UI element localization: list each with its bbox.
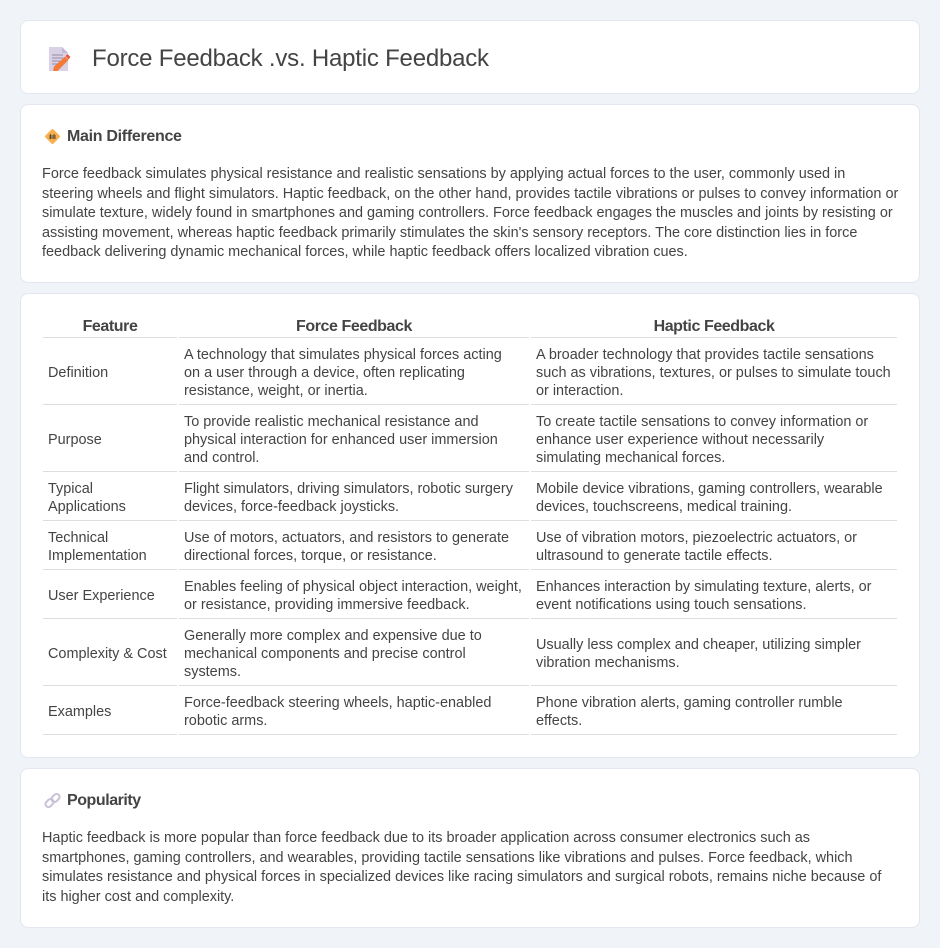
text block: popularity paragraph: Haptic feedback is more popular than force feedback due to its broader application across consumer electronics such as [42, 830, 810, 846]
row: examples [48, 695, 843, 729]
text block: popularity paragraph: simulates resistance and physical forces in specialized devices like racing simulators and surgical robots, remains niche because of [42, 869, 881, 885]
row: definition: A technology that simulates physical forces acting [184, 347, 502, 363]
row: purpose: simulating mechanical forces. [536, 450, 725, 466]
text block: main difference paragraph: Force feedback simulates physical resistance and realistic sensations by applying actual forces to the user, commonly used in [42, 166, 845, 182]
row: definition [48, 347, 891, 399]
row: definition: resistance, weight, or inertia. [184, 383, 368, 399]
heading: main difference: Main Difference [67, 128, 182, 145]
row: complexity and cost [48, 628, 861, 680]
row: technical implementation: Use of vibration motors, piezoelectric actuators, or [536, 530, 857, 546]
icon: document with pencil [49, 47, 70, 71]
row: typical applications: Mobile device vibrations, gaming controllers, wearable [536, 481, 883, 497]
row: examples: robotic arms. [184, 713, 267, 729]
row: purpose [48, 414, 868, 466]
heading: popularity: Popularity [67, 792, 141, 809]
row: user experience [48, 579, 872, 613]
row: user experience: event notifications using touch sensations. [536, 597, 806, 613]
text block: main difference paragraph: simulate texture, widely found in smartphones and gaming controllers. Force feedback engages the muscles and joints by resisting or [42, 205, 893, 221]
row: complexity and cost: Generally more complex and expensive due to [184, 628, 482, 644]
text block: main difference paragraph: steering wheels and flight simulators. Haptic feedback, on the other hand, provides tactile vibrations or pulses to convey information or [42, 186, 898, 202]
row: examples: Examples [48, 704, 111, 720]
panel: main difference [20, 104, 920, 283]
row: technical implementation: ultrasound to generate tactile effects. [536, 548, 772, 564]
row: purpose: Purpose [48, 432, 102, 448]
row: examples: Force-feedback steering wheels, haptic-enabled [184, 695, 491, 711]
text block: popularity paragraph [42, 830, 882, 905]
row: user experience: Enables feeling of physical object interaction, weight, [184, 579, 522, 595]
row: purpose: To create tactile sensations to convey information or [536, 414, 868, 430]
row: typical applications: devices, force-feedback joysticks. [184, 499, 399, 515]
row: complexity and cost: Usually less complex and cheaper, utilizing simpler [536, 637, 861, 653]
header: force feedback: Force Feedback [296, 318, 412, 335]
text block: main difference paragraph: assisting movement, whereas haptic feedback primarily stimulates the skin's sensory receptors. The core distinction lies in force [42, 225, 857, 241]
text block: popularity paragraph: its higher cost and complexity. [42, 889, 234, 905]
row: examples: effects. [536, 713, 582, 729]
row: complexity and cost: systems. [184, 664, 241, 680]
row: typical applications: devices, touchscreens, medical training. [536, 499, 792, 515]
row: technical implementation [48, 530, 857, 564]
row: typical applications: Flight simulators, driving simulators, robotic surgery [184, 481, 513, 497]
panel: title card [20, 20, 920, 94]
row: user experience: or resistance, providing immersive feedback. [184, 597, 470, 613]
row: technical implementation: Technical [48, 530, 108, 546]
row: complexity and cost: Complexity & Cost [48, 646, 167, 662]
panel: comparison table [20, 293, 920, 758]
row: technical implementation: Use of motors, actuators, and resistors to generate [184, 530, 509, 546]
text block: popularity paragraph: smartphones, gaming controllers, and wearables, providing tactile sensations like vibrations and pulses. Force feedback, which [42, 850, 853, 866]
row: user experience: Enhances interaction by simulating texture, alerts, or [536, 579, 871, 595]
row: purpose: and control. [184, 450, 259, 466]
row: typical applications: Typical [48, 481, 93, 497]
row: technical implementation: directional forces, torque, or resistance. [184, 548, 437, 564]
panel: popularity [20, 768, 920, 928]
row: purpose: enhance user experience without necessarily [536, 432, 824, 448]
row: technical implementation: Implementation [48, 548, 147, 564]
table header row [83, 318, 775, 335]
row: purpose: To provide realistic mechanical resistance and [184, 414, 479, 430]
row: definition: such as vibrations, textures, or pulses to simulate touch [536, 365, 891, 381]
text block: main difference paragraph [42, 166, 898, 260]
row: user experience: User Experience [48, 588, 155, 604]
icon: orange diamond [45, 129, 60, 144]
row: definition: A broader technology that provides tactile sensations [536, 347, 874, 363]
row: definition: on a user through a device, often replicating [184, 365, 465, 381]
icon: chain link [44, 793, 60, 808]
row: definition: Definition [48, 365, 108, 381]
row: purpose: physical interaction for enhanced user immersion [184, 432, 498, 448]
header: haptic feedback: Haptic Feedback [654, 318, 774, 335]
row: complexity and cost: vibration mechanisms. [536, 655, 680, 671]
row: definition: or interaction. [536, 383, 623, 399]
row: examples: Phone vibration alerts, gaming controller rumble [536, 695, 843, 711]
title: Force Feedback .vs. Haptic Feedback [92, 45, 489, 72]
row: complexity and cost: mechanical components and precise control [184, 646, 466, 662]
header: feature: Feature [83, 318, 137, 335]
row: typical applications [48, 481, 883, 515]
row: typical applications: Applications [48, 499, 126, 515]
text block: main difference paragraph: feedback delivering dynamic mechanical forces, while haptic feedback offers localized vibration cues. [42, 244, 688, 260]
